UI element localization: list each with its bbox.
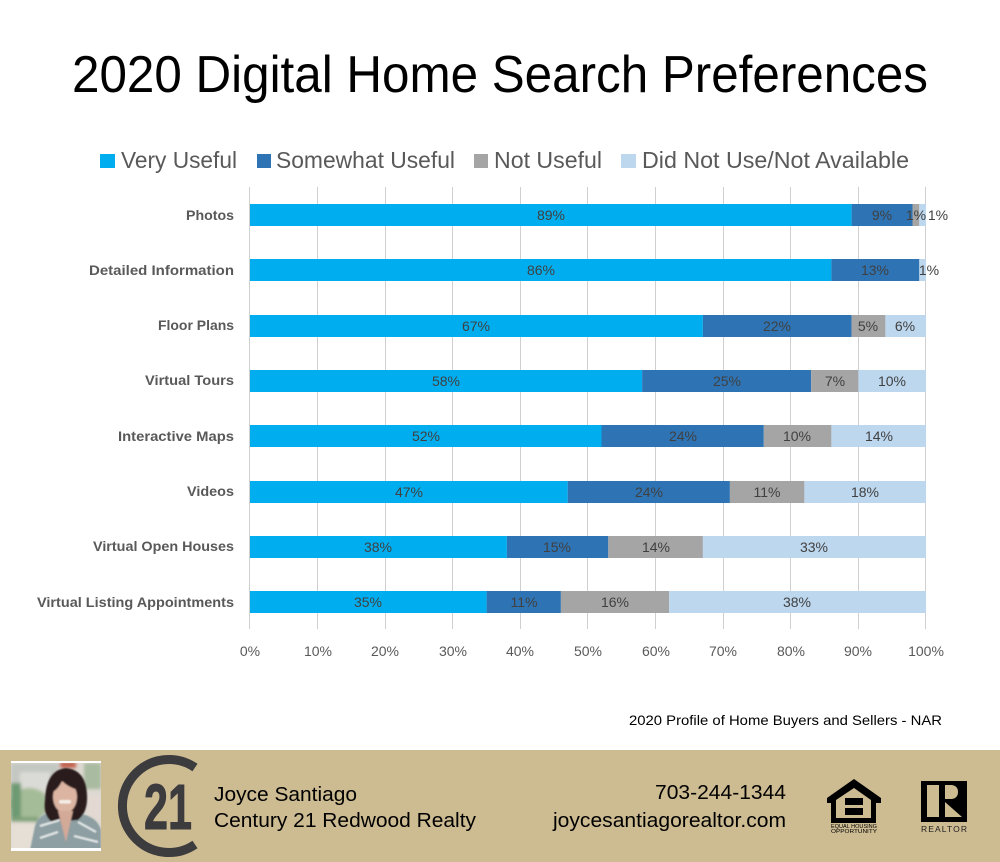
icon: realtor: REALTOR: [921, 824, 967, 834]
x axis labels: 70%: [709, 643, 737, 659]
row: Interactive Maps: [118, 425, 926, 447]
agent name and company: Joyce Santiago: [214, 784, 357, 806]
row: Interactive Maps: Interactive Maps: [118, 428, 234, 444]
x axis labels: 100%: [908, 643, 944, 659]
agent photo: [9, 761, 101, 851]
row: Photos: 9%: [872, 207, 892, 223]
x axis labels: 20%: [371, 643, 399, 659]
row: Virtual Open Houses: 15%: [543, 539, 571, 555]
legend: [100, 147, 909, 173]
title: 2020 Digital Home Search Preferences: [72, 46, 928, 104]
row: Virtual Tours: [145, 370, 926, 392]
row: Interactive Maps: 52%: [412, 428, 440, 444]
source note: 2020 Profile of Home Buyers and Sellers - NAR: [629, 712, 942, 728]
row: Floor Plans: 22%: [763, 318, 791, 334]
legend item: Did Not Use/Not Available: Did Not Use/Not Available: [642, 147, 909, 173]
x axis labels: 40%: [506, 643, 534, 659]
row: Photos: 1%: [928, 207, 948, 223]
row: Virtual Listing Appointments: 16%: [601, 594, 629, 610]
row: Floor Plans: 6%: [895, 318, 915, 334]
row: Virtual Tours: Virtual Tours: [145, 372, 234, 388]
row: Videos: Videos: [187, 483, 234, 499]
row: Detailed Information: 13%: [861, 262, 889, 278]
logo: Century 21: 21: [144, 771, 192, 843]
icon: realtor: [921, 781, 967, 834]
agent name and company: Century 21 Redwood Realty: [214, 810, 476, 832]
row: Floor Plans: Floor Plans: [158, 317, 234, 333]
row: Detailed Information: 1%: [919, 262, 939, 278]
row: Virtual Listing Appointments: 35%: [354, 594, 382, 610]
row: Videos: [187, 481, 926, 503]
row: Virtual Listing Appointments: [37, 591, 926, 613]
row: Virtual Tours: 58%: [432, 373, 460, 389]
icon: equal housing opportunity: EQUAL HOUSING: [831, 824, 877, 830]
row: Photos: [186, 204, 948, 226]
x axis labels: 30%: [439, 643, 467, 659]
stacked bar chart: [37, 187, 948, 659]
x axis labels: 80%: [777, 643, 805, 659]
row: Photos: 1%: [906, 207, 926, 223]
row: Virtual Open Houses: 38%: [364, 539, 392, 555]
row: Videos: 18%: [851, 484, 879, 500]
row: Virtual Tours: 10%: [878, 373, 906, 389]
row: Floor Plans: 5%: [858, 318, 878, 334]
row: Virtual Open Houses: [93, 536, 926, 558]
row: Virtual Listing Appointments: Virtual Listing Appointments: [37, 594, 234, 610]
row: Detailed Information: 86%: [527, 262, 555, 278]
row: Videos: 11%: [754, 484, 780, 500]
row: Interactive Maps: 10%: [783, 428, 811, 444]
row: Detailed Information: Detailed Information: [89, 262, 234, 278]
footer band: [0, 750, 1000, 862]
row: Virtual Tours: 7%: [825, 373, 845, 389]
legend item: Somewhat Useful: Somewhat Useful: [276, 147, 455, 173]
logo: Century 21: [122, 760, 195, 852]
row: Virtual Listing Appointments: 11%: [511, 594, 537, 610]
row: Detailed Information: [89, 259, 939, 281]
row: Virtual Listing Appointments: 38%: [783, 594, 811, 610]
icon: equal housing opportunity: [827, 779, 881, 835]
x axis labels: 10%: [304, 643, 332, 659]
icon: equal housing opportunity: OPPORTUNITY: [831, 829, 878, 835]
legend item: Very Useful: Very Useful: [121, 147, 237, 173]
row: Photos: Photos: [186, 207, 234, 223]
legend item: Not Useful: Not Useful: [494, 147, 602, 173]
row: Photos: 89%: [537, 207, 565, 223]
row: Videos: 24%: [635, 484, 663, 500]
contact details: 703-244-1344: [655, 782, 786, 804]
row: Interactive Maps: 14%: [865, 428, 893, 444]
row: Videos: 47%: [395, 484, 423, 500]
agent name and company: [214, 784, 476, 832]
x axis labels: 0%: [240, 643, 260, 659]
contact details: [552, 782, 786, 832]
row: Interactive Maps: 24%: [669, 428, 697, 444]
row: Virtual Open Houses: 14%: [642, 539, 670, 555]
row: Virtual Open Houses: 33%: [800, 539, 828, 555]
row: Virtual Open Houses: Virtual Open Houses: [93, 538, 234, 554]
x axis labels: [240, 643, 944, 659]
x axis labels: 90%: [844, 643, 872, 659]
row: Floor Plans: [158, 315, 926, 337]
contact details: joycesantiagorealtor.com: [552, 810, 786, 832]
row: Virtual Tours: 25%: [713, 373, 741, 389]
x axis labels: 50%: [574, 643, 602, 659]
x axis labels: 60%: [642, 643, 670, 659]
row: Floor Plans: 67%: [462, 318, 490, 334]
